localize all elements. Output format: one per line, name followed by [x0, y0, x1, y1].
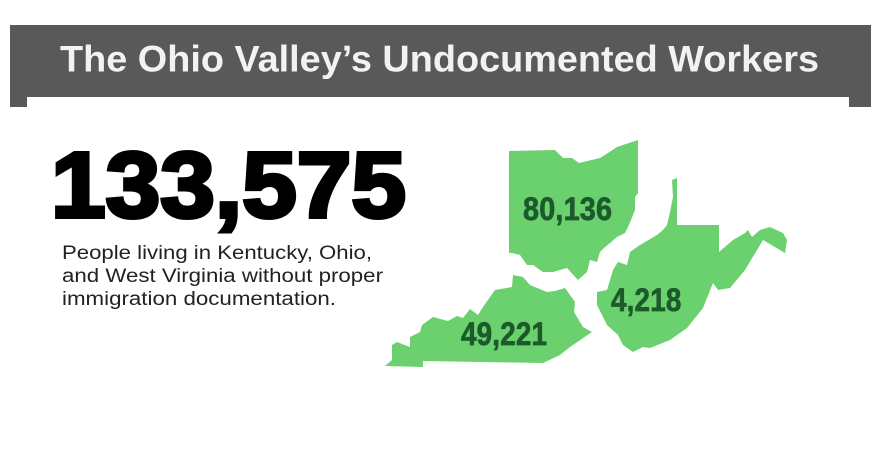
description text [62, 242, 384, 310]
label: West Virginia count: 4,218 [611, 283, 682, 318]
state: West Virginia [597, 178, 787, 352]
title: The Ohio Valley’s Undocumented Workers [60, 38, 819, 80]
label: Kentucky count: 49,221 [461, 317, 547, 352]
label: Ohio count: 80,136 [523, 192, 612, 227]
description text: and West Virginia without proper [62, 265, 384, 287]
total number: 133,575 [51, 133, 406, 237]
map of three states [385, 140, 787, 367]
title banner [10, 25, 871, 107]
description text: People living in Kentucky, Ohio, [62, 242, 372, 264]
state: Kentucky [385, 275, 592, 367]
state: Ohio [509, 140, 638, 280]
description text: immigration documentation. [62, 288, 336, 310]
